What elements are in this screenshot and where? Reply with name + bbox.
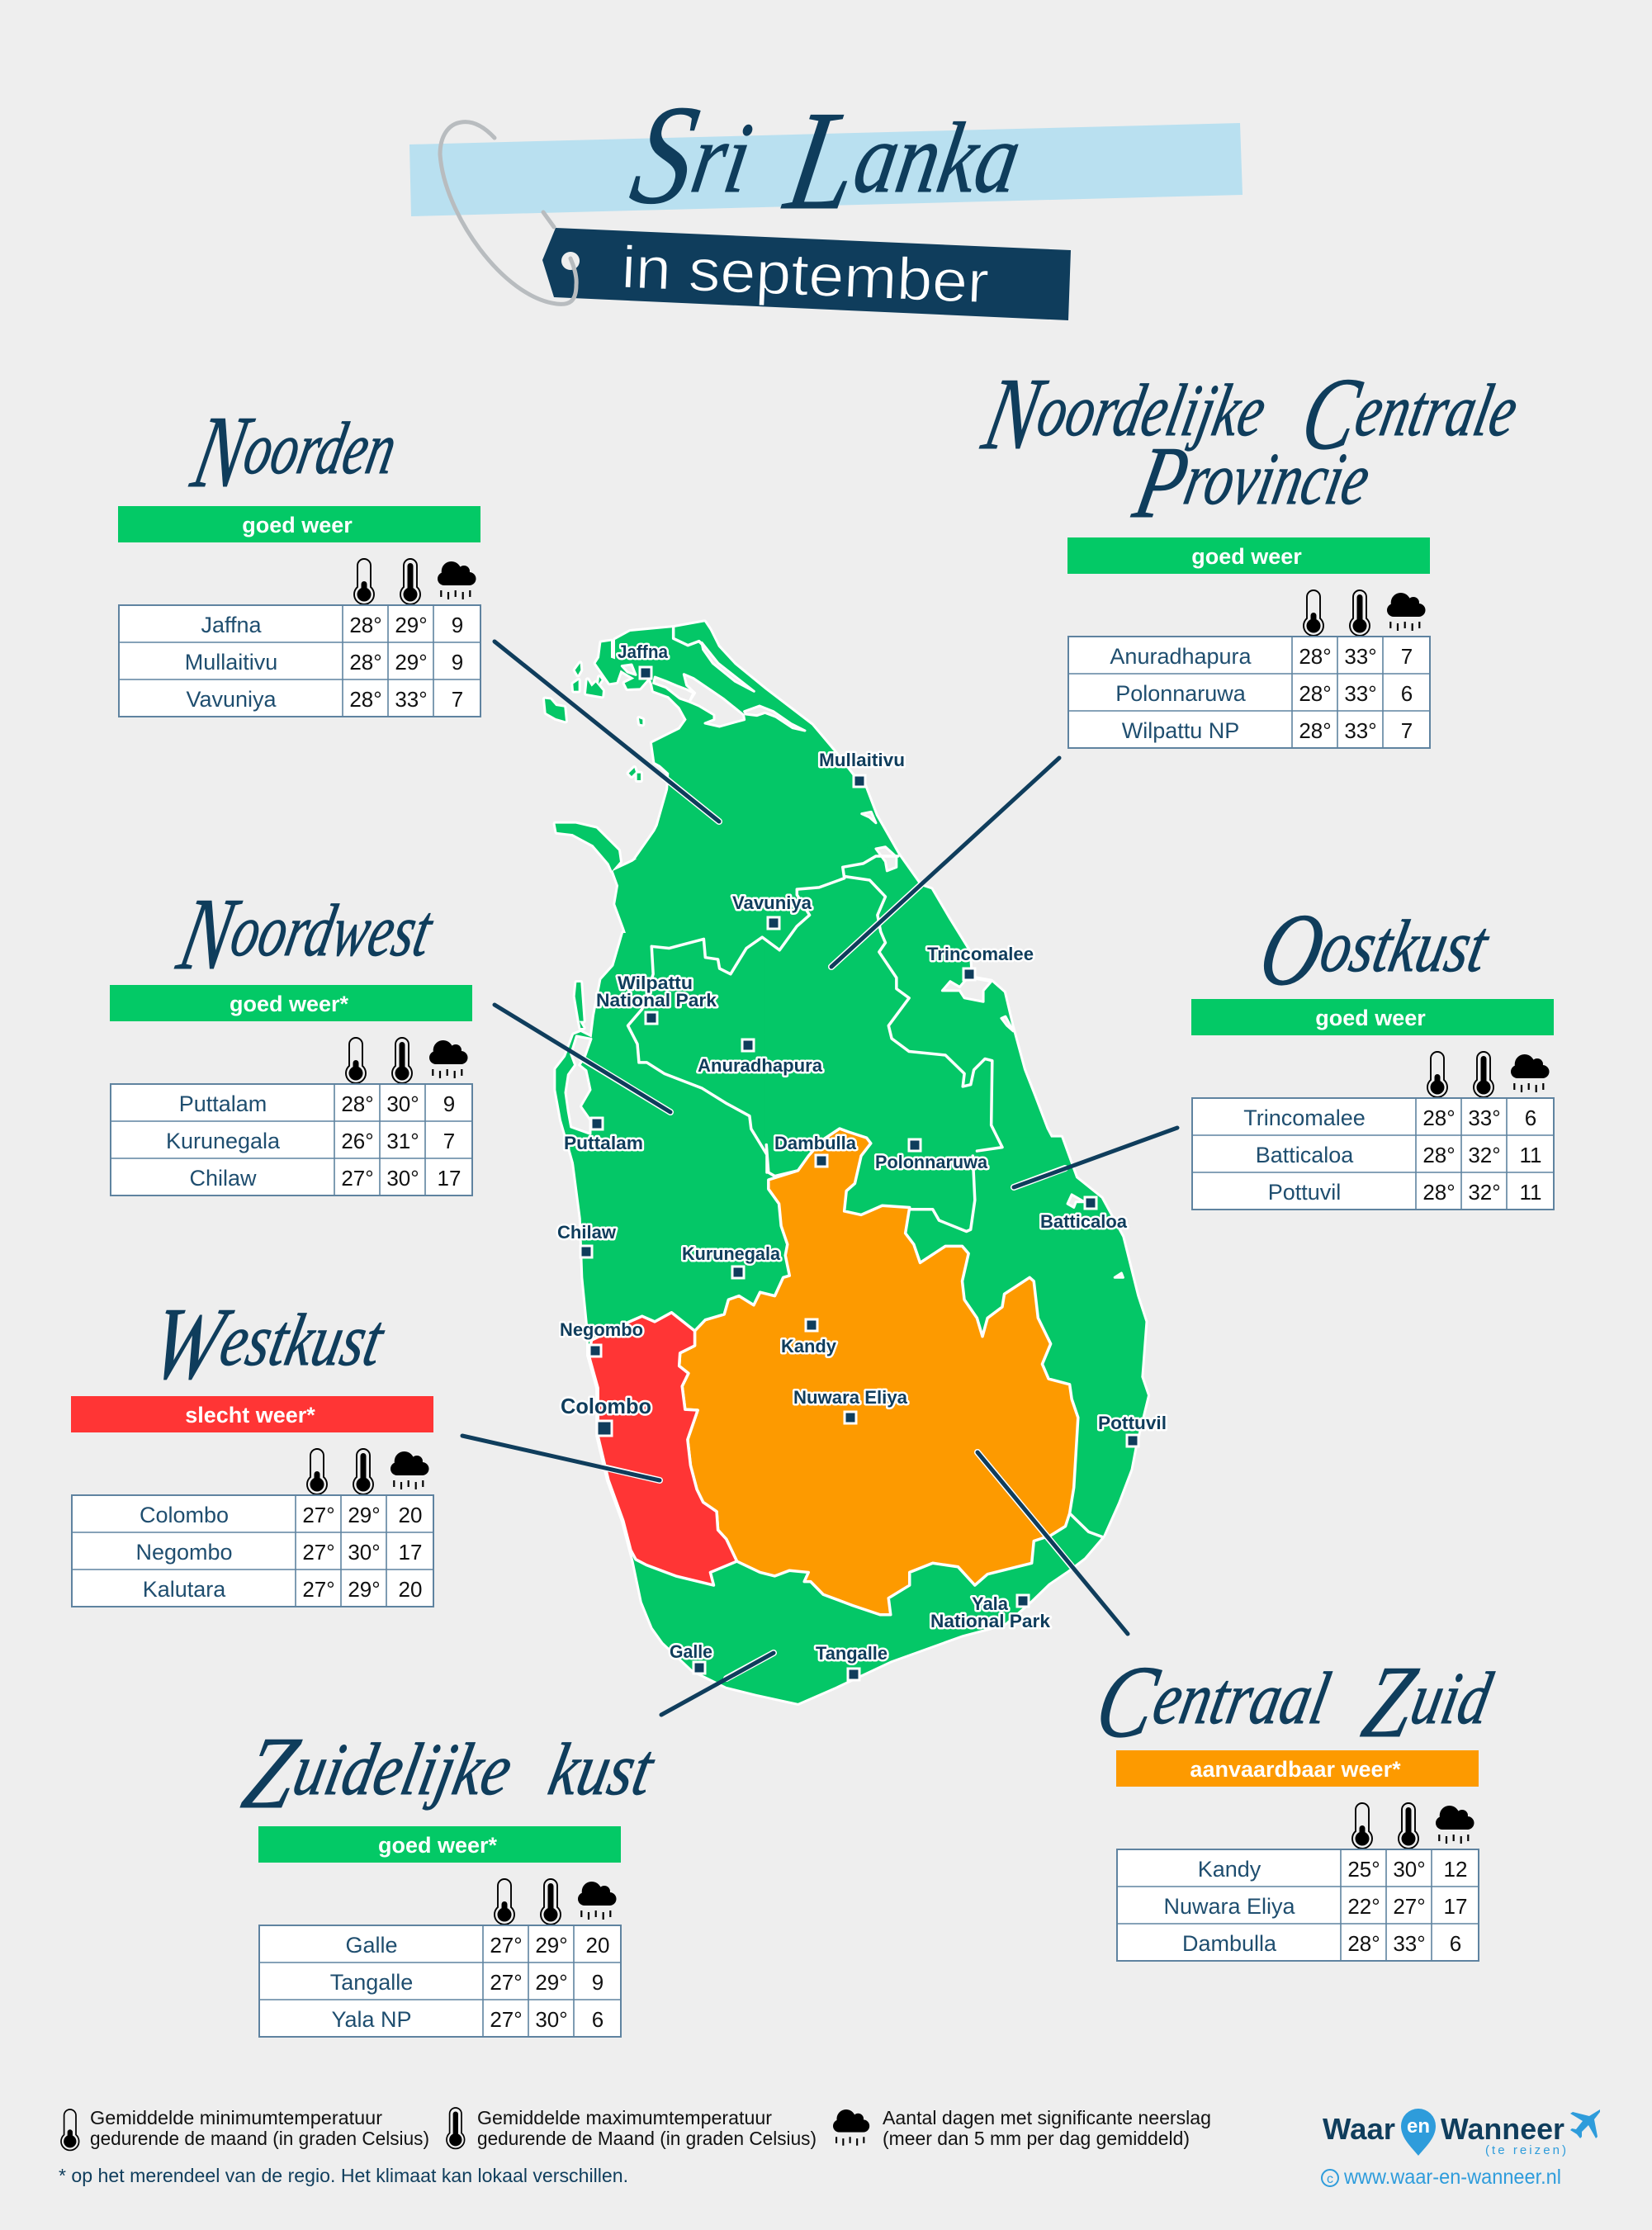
weather table — [1068, 637, 1430, 748]
heading: Oostkust: ostkust — [1314, 905, 1497, 987]
legend text: minimum temperature: Gemiddelde minimumtemperatuur — [90, 2107, 382, 2128]
weather table: Kurunegala — [166, 1129, 281, 1153]
weather table — [119, 605, 480, 717]
icon: rain cloud — [578, 1882, 616, 1920]
weather table: 25° — [1347, 1857, 1380, 1882]
icon: maximum temperature — [400, 559, 420, 604]
icon: rain cloud — [429, 1040, 467, 1078]
weather table: Dambulla — [1182, 1931, 1277, 1956]
weather table: 28° — [349, 650, 382, 675]
weather table: 9 — [592, 1970, 604, 1995]
city labels: Vavuniya — [732, 892, 812, 913]
weather table: 6 — [1450, 1931, 1461, 1956]
badge — [1067, 537, 1430, 574]
weather table: 32° — [1468, 1143, 1501, 1167]
logo: Waar en Wanneer: en — [1407, 2115, 1430, 2138]
weather table: Mullaitivu — [185, 650, 277, 675]
heading: Westkust: estkust — [214, 1299, 392, 1381]
weather table: 33° — [1344, 718, 1377, 743]
weather table: 29° — [348, 1503, 381, 1527]
connector lines — [462, 642, 1177, 1715]
city labels: Chilaw — [557, 1222, 617, 1243]
weather table: 17 — [399, 1540, 422, 1565]
weather table: 29° — [395, 613, 428, 637]
badge: slecht weer* — [185, 1403, 315, 1427]
weather table: 6 — [1401, 681, 1413, 706]
icon: airplane — [1570, 2109, 1600, 2138]
weather table: Kandy — [1198, 1857, 1261, 1882]
city labels: Batticaloa — [1040, 1211, 1128, 1232]
heading: Oostkust: O — [1251, 892, 1334, 1007]
logo: Waar en Wanneer: Waar — [1323, 2112, 1395, 2146]
weather table: 29° — [535, 1970, 568, 1995]
badge: goed weer — [1191, 544, 1302, 569]
icon: minimum temperature — [495, 1879, 514, 1925]
weather table: 28° — [1422, 1180, 1456, 1205]
weather table: 31° — [386, 1129, 419, 1153]
heading: Noordelijke Centrale Provincie: rovincie — [1178, 438, 1377, 520]
legend icon: rain cloud — [833, 2109, 869, 2146]
icon: maximum temperature — [1399, 1803, 1418, 1849]
city labels: Nuwara Eliya — [793, 1387, 908, 1408]
panel: Oostkust — [1191, 999, 1554, 1210]
weather table: 27° — [302, 1577, 335, 1602]
weather table: 30° — [535, 2007, 568, 2032]
weather table: 28° — [349, 687, 382, 712]
heading: Centraal Zuid: C — [1087, 1645, 1168, 1759]
heading: Zuidelijke kust: Z — [234, 1716, 308, 1830]
badge — [1191, 999, 1554, 1035]
weather table: Trincomalee — [1243, 1106, 1366, 1130]
weather table: 30° — [386, 1091, 419, 1116]
panel: Westkust — [71, 1396, 433, 1607]
legend text: minimum temperature — [90, 2107, 429, 2149]
footnote: * op het merendeel van de regio. Het klimaat kan lokaal verschillen. — [59, 2165, 628, 2186]
weather table: 17 — [438, 1166, 461, 1191]
heading: Noordelijke Centrale Provincie: P — [1125, 425, 1198, 540]
badge: goed weer — [1315, 1006, 1426, 1030]
weather table: Puttalam — [179, 1091, 267, 1116]
weather table: 27° — [490, 2007, 523, 2032]
badge — [1116, 1750, 1479, 1787]
badge: aanvaardbaar weer* — [1190, 1757, 1401, 1782]
weather table: 29° — [348, 1577, 381, 1602]
weather table: 30° — [386, 1166, 419, 1191]
city labels: Colombo — [561, 1394, 651, 1418]
weather table: 28° — [1422, 1143, 1456, 1167]
icon: minimum temperature — [1304, 590, 1323, 636]
legend text: maximum temperature — [477, 2107, 817, 2149]
icon: minimum temperature — [307, 1449, 327, 1494]
title text: S — [622, 77, 708, 234]
weather table: 27° — [341, 1166, 374, 1191]
luggage tag string — [440, 122, 576, 304]
weather table: Jaffna — [201, 613, 263, 637]
heading: Noordelijke Centrale Provincie: C — [1293, 357, 1370, 471]
city labels: Wilpattu — [618, 973, 693, 993]
title banner: light blue — [409, 123, 1243, 216]
city labels: Trincomalee — [927, 944, 1034, 964]
legend text: maximum temperature: Gemiddelde maximumtemperatuur — [477, 2107, 772, 2128]
city labels: Kandy — [781, 1336, 837, 1356]
panel: Zuidelijke kust — [258, 1826, 621, 2037]
heading: Noordelijke Centrale Provincie: oordelijke — [1031, 369, 1314, 452]
icon: rain cloud — [1387, 593, 1425, 631]
weather table: 27° — [1393, 1894, 1426, 1919]
badge — [118, 506, 480, 542]
region borders north — [628, 856, 1002, 1172]
weather table: 33° — [1344, 681, 1377, 706]
weather table: 17 — [1444, 1894, 1467, 1919]
weather table: Polonnaruwa — [1115, 681, 1247, 706]
icon: maximum temperature — [353, 1449, 373, 1494]
heading: Noorden: oorden — [238, 407, 404, 490]
weather table: 33° — [395, 687, 428, 712]
title block — [409, 77, 1243, 320]
heading: Westkust: W — [142, 1286, 240, 1401]
weather table: 27° — [302, 1503, 335, 1527]
weather table: 33° — [1344, 644, 1377, 669]
weather table: Kalutara — [143, 1577, 226, 1602]
icon: rain cloud — [391, 1451, 429, 1489]
weather table: Negombo — [135, 1540, 233, 1565]
map of Sri Lanka — [462, 622, 1177, 1715]
city labels: Jaffna — [618, 642, 669, 662]
lagoons and inland water: Jaffna — [622, 627, 805, 731]
icon: maximum temperature — [392, 1038, 412, 1083]
badge — [258, 1826, 621, 1863]
heading: Noordelijke Centrale Provincie: N — [974, 357, 1055, 471]
weather table: 28° — [341, 1091, 374, 1116]
heading: Centraal Zuid: entraal — [1147, 1657, 1375, 1740]
city labels: Dambulla — [774, 1133, 857, 1153]
weather table: 32° — [1468, 1180, 1501, 1205]
weather table: Yala NP — [331, 2007, 412, 2032]
weather table: 9 — [452, 650, 463, 675]
logo: Waar en Wanneer: (te reizen) — [1485, 2143, 1566, 2157]
weather table: 22° — [1347, 1894, 1380, 1919]
weather table: 11 — [1519, 1180, 1542, 1205]
weather table: 9 — [443, 1091, 455, 1116]
city labels: Galle — [670, 1641, 712, 1662]
weather table: 30° — [1393, 1857, 1426, 1882]
legend text: precipitation: (meer dan 5 mm per dag gemiddeld) — [883, 2128, 1190, 2149]
weather table: 28° — [1347, 1931, 1380, 1956]
weather table: Galle — [345, 1933, 398, 1958]
legend icon: minimum temperature — [61, 2109, 79, 2150]
city labels — [557, 642, 1167, 1664]
city labels: National Park — [930, 1611, 1051, 1631]
logo: Waar en Wanneer: Wanneer — [1441, 2112, 1564, 2146]
weather table: Pottuvil — [1268, 1180, 1341, 1205]
weather table — [259, 1925, 621, 2037]
heading: Noordelijke Centrale Provincie: entrale — [1349, 369, 1525, 452]
weather table: 7 — [1401, 644, 1413, 669]
badge — [71, 1396, 433, 1432]
website: www.waar-en-wanneer.nl — [1343, 2166, 1561, 2189]
weather table — [1192, 1098, 1554, 1210]
weather table: 33° — [1468, 1106, 1501, 1130]
logo: Waar en Wanneer — [1322, 2109, 1600, 2189]
subtitle: in september — [620, 234, 990, 316]
lagoons and inland water: east coast — [862, 812, 1013, 1031]
weather table: Tangalle — [330, 1970, 413, 1995]
lagoons and inland water: Puttalam — [566, 1036, 591, 1134]
region: central south, orange — [589, 1129, 1123, 1615]
weather table: 20 — [399, 1503, 422, 1527]
weather table: 30° — [348, 1540, 381, 1565]
heading: Centraal Zuid: uid — [1404, 1657, 1498, 1740]
heading: Noordwest: N — [169, 877, 249, 992]
website: c — [1327, 2172, 1333, 2186]
weather table: 20 — [586, 1933, 609, 1958]
weather table: Nuwara Eliya — [1163, 1894, 1296, 1919]
weather table: 7 — [1401, 718, 1413, 743]
panel: Noordelijke Centrale Provincie — [1067, 537, 1430, 748]
badge: goed weer — [242, 513, 353, 537]
weather table: 28° — [1422, 1106, 1456, 1130]
coast outline — [545, 622, 1148, 1703]
weather table: 7 — [443, 1129, 455, 1153]
title text: L — [774, 83, 870, 239]
legend text: maximum temperature: gedurende de Maand (in graden Celsius) — [477, 2128, 817, 2149]
icon: rain cloud — [1511, 1054, 1549, 1092]
badge — [110, 985, 472, 1021]
panel: Centraal Zuid — [1116, 1750, 1479, 1961]
weather table: Chilaw — [189, 1166, 257, 1191]
luggage tag: navy — [542, 228, 1071, 320]
city labels: Tangalle — [816, 1643, 888, 1664]
heading: Noorden: N — [183, 395, 262, 509]
legend icon: maximum temperature — [447, 2108, 465, 2148]
weather table: 6 — [592, 2007, 604, 2032]
city markers — [580, 667, 1138, 1680]
heading: Zuidelijke kust: uidelijke kust — [286, 1728, 662, 1811]
icon: minimum temperature — [1427, 1052, 1447, 1097]
icon: map pin — [1401, 2109, 1436, 2156]
title text: anka — [847, 102, 1029, 214]
city labels: Kurunegala — [682, 1243, 781, 1264]
city labels: Anuradhapura — [698, 1055, 823, 1076]
weather table: 28° — [1299, 681, 1332, 706]
region: west coast, red — [589, 1313, 737, 1585]
weather table: 27° — [302, 1540, 335, 1565]
weather table: Batticaloa — [1256, 1143, 1354, 1167]
weather table: 7 — [452, 687, 463, 712]
icon: minimum temperature — [346, 1038, 366, 1083]
weather table: 33° — [1393, 1931, 1426, 1956]
weather table — [111, 1084, 472, 1195]
weather table — [1117, 1849, 1479, 1961]
panel: Noordwest — [110, 985, 472, 1195]
city labels: Pottuvil — [1098, 1413, 1167, 1433]
weather table: 12 — [1444, 1857, 1467, 1882]
heading: Noordelijke Centrale Provincie — [974, 357, 1527, 540]
city labels: Puttalam — [564, 1133, 643, 1153]
city labels: National Park — [596, 990, 717, 1011]
weather table: 28° — [1299, 644, 1332, 669]
heading: Noordwest: oordwest — [225, 889, 441, 972]
legend — [59, 2107, 1211, 2186]
badge: goed weer* — [378, 1833, 498, 1858]
weather table: 28° — [349, 613, 382, 637]
weather table: 20 — [399, 1577, 422, 1602]
panel: Noorden — [118, 506, 480, 717]
weather table: 6 — [1525, 1106, 1536, 1130]
badge: goed weer* — [230, 992, 349, 1016]
city labels: Yala — [972, 1593, 1009, 1614]
legend text: precipitation: Aantal dagen met significante neerslag — [883, 2107, 1211, 2128]
icon: minimum temperature — [354, 559, 374, 604]
region: green land — [545, 622, 1148, 1703]
weather table — [72, 1495, 433, 1607]
weather table: Wilpattu NP — [1122, 718, 1239, 743]
icon: maximum temperature — [541, 1879, 561, 1925]
weather table: Anuradhapura — [1110, 644, 1252, 669]
weather table: 29° — [535, 1933, 568, 1958]
weather table: 9 — [452, 613, 463, 637]
icon: rain cloud — [438, 561, 476, 599]
weather table: Colombo — [140, 1503, 229, 1527]
city labels: Mullaitivu — [819, 750, 905, 770]
weather table: 28° — [1299, 718, 1332, 743]
weather table: 27° — [490, 1933, 523, 1958]
city labels: Negombo — [560, 1319, 643, 1340]
title text: ri — [684, 102, 801, 214]
weather table: 27° — [490, 1970, 523, 1995]
weather table: Vavuniya — [186, 687, 277, 712]
heading: Centraal Zuid: Z — [1354, 1645, 1426, 1759]
legend text: minimum temperature: gedurende de maand (in graden Celsius) — [90, 2128, 429, 2149]
icon: maximum temperature — [1474, 1052, 1493, 1097]
city labels: Polonnaruwa — [875, 1152, 988, 1172]
weather table: 26° — [341, 1129, 374, 1153]
icon: maximum temperature — [1350, 590, 1370, 636]
weather table: 11 — [1519, 1143, 1542, 1167]
icon: minimum temperature — [1352, 1803, 1372, 1849]
weather table: 29° — [395, 650, 428, 675]
icon: rain cloud — [1436, 1806, 1474, 1844]
legend text: precipitation — [883, 2107, 1211, 2149]
